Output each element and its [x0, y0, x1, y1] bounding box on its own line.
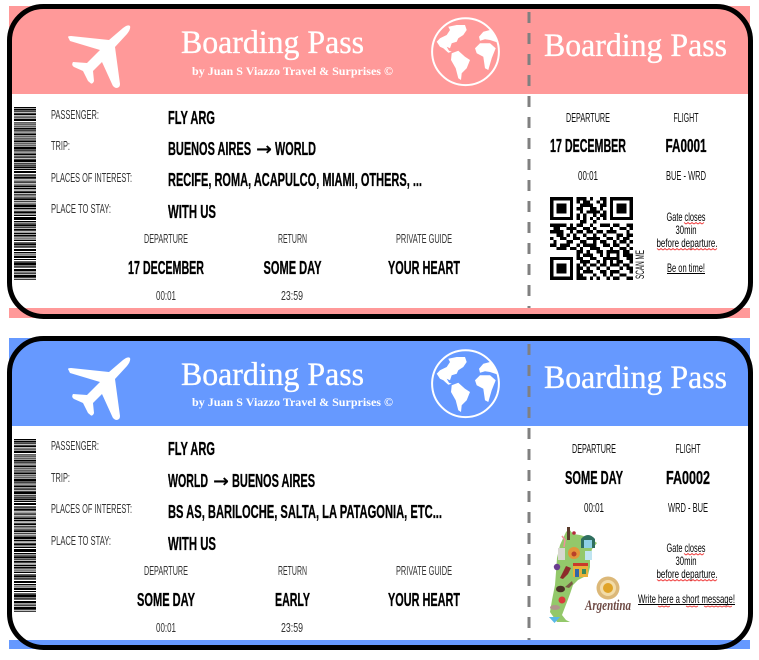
ticket: blue boarding pass [9, 338, 750, 649]
return column: RETURN [278, 563, 307, 578]
value: place to stay: WITH US [168, 534, 216, 554]
illustration: Argentina map [549, 527, 631, 623]
departure column [137, 563, 195, 635]
private guide column [388, 563, 460, 610]
gate note: 30min [676, 554, 696, 568]
stub departure: 00:01 [578, 168, 598, 183]
return column: SOME DAY [264, 258, 322, 278]
private guide column: PRIVATE GUIDE [396, 231, 452, 246]
return column [264, 231, 322, 303]
stub flight: BUE - WRD [666, 168, 706, 183]
stub flight [666, 441, 710, 515]
gate note [656, 210, 718, 275]
value: places of interest: BS AS, BARILOCHE, SALTA, LA PATAGONIA, ETC... [168, 502, 442, 522]
blue header band [9, 338, 750, 426]
icon: airplane [68, 25, 130, 88]
value: places of interest: RECIFE, ROMA, ACAPULCO, MIAMI, OTHERS, ... [168, 170, 422, 190]
stub departure: 17 DECEMBER [550, 136, 626, 156]
return column: 23:59 [281, 620, 303, 635]
value: trip: BUENOS AIRES [168, 139, 251, 159]
stub departure: 00:01 [584, 500, 604, 515]
pink header band [9, 6, 750, 94]
private guide column [388, 231, 460, 278]
icon: airplane [68, 357, 130, 420]
stub flight: FLIGHT [676, 441, 701, 456]
map silhouette [550, 529, 597, 622]
value: place to stay: WITH US [168, 202, 216, 222]
stub departure: DEPARTURE [566, 110, 610, 125]
rounded border [10, 338, 750, 648]
sun of May [596, 576, 620, 600]
value: passenger: FLY ARG [168, 108, 215, 128]
stub departure: DEPARTURE [572, 441, 616, 456]
private guide column: YOUR HEART [388, 258, 460, 278]
rounded border [10, 6, 750, 316]
subheading: by line: by Juan S Viazzo Travel & Surprises © [192, 397, 393, 409]
gate note: 30min [676, 223, 696, 237]
label: place to stay: PLACE TO STAY: [51, 201, 111, 216]
label: passenger: PASSENGER: [51, 438, 99, 453]
departure column: 00:01 [156, 620, 176, 635]
return column [275, 563, 310, 635]
label: place to stay: PLACE TO STAY: [51, 533, 111, 548]
stub flight [666, 110, 706, 183]
label: places of interest: PLACES OF INTEREST: [51, 501, 132, 516]
stub flight: WRD - BUE [668, 500, 708, 515]
blue bottom band [9, 640, 750, 649]
private guide column: YOUR HEART [388, 590, 460, 610]
label: passenger: PASSENGER: [51, 107, 99, 122]
Argentina lettering: Argentina [584, 598, 631, 614]
gate note: Gate closes [666, 210, 706, 224]
barcode [14, 107, 36, 280]
value: trip: WORLD [275, 139, 316, 159]
tear line [528, 344, 530, 640]
label: trip: TRIP: [51, 470, 70, 485]
private guide column: PRIVATE GUIDE [396, 563, 452, 578]
value: trip: BUENOS AIRES [232, 471, 315, 491]
heading: Boarding Pass: Boarding Pass [181, 25, 364, 61]
icon: globe [432, 18, 499, 85]
subheading: by line: by Juan S Viazzo Travel & Surprises © [192, 66, 393, 78]
stub flight: FA0002 [666, 468, 710, 488]
stub departure [565, 441, 623, 515]
gate note: Gate closes [666, 541, 706, 555]
departure column: SOME DAY [137, 590, 195, 610]
value: trip: → [213, 471, 229, 492]
departure column: DEPARTURE [144, 563, 188, 578]
value: trip: → [256, 139, 272, 160]
return column: EARLY [275, 590, 310, 610]
gate note: before departure. [656, 236, 718, 250]
QR code [550, 197, 633, 280]
departure column: DEPARTURE [144, 231, 188, 246]
return column: 23:59 [281, 288, 303, 303]
heading: Boarding Pass: Boarding Pass [181, 357, 364, 393]
value: trip [168, 471, 315, 492]
gate note [638, 541, 735, 607]
return column: RETURN [278, 231, 307, 246]
gate note: Be on time! [667, 261, 705, 275]
icon: globe [432, 350, 499, 417]
label: trip: TRIP: [51, 138, 70, 153]
stub flight: FA0001 [666, 136, 706, 156]
value: trip: WORLD [168, 471, 208, 491]
stub departure [550, 110, 626, 183]
tear line [528, 12, 530, 308]
stub heading: Boarding Pass: Boarding Pass [544, 28, 727, 64]
ticket: pink boarding pass [9, 6, 750, 318]
pink bottom band [9, 308, 750, 318]
departure column: 17 DECEMBER [128, 258, 204, 278]
stub flight: FLIGHT [674, 110, 699, 125]
label: places of interest: PLACES OF INTEREST: [51, 170, 132, 185]
map landmarks [549, 527, 595, 623]
value: passenger: FLY ARG [168, 439, 215, 459]
gate note: before departure. [656, 567, 718, 581]
scan me label: SCAN ME [633, 250, 647, 279]
departure column [128, 231, 204, 303]
departure column: 00:01 [156, 288, 176, 303]
barcode [14, 439, 36, 612]
stub heading: Boarding Pass: Boarding Pass [544, 360, 727, 396]
stub departure: SOME DAY [565, 468, 623, 488]
